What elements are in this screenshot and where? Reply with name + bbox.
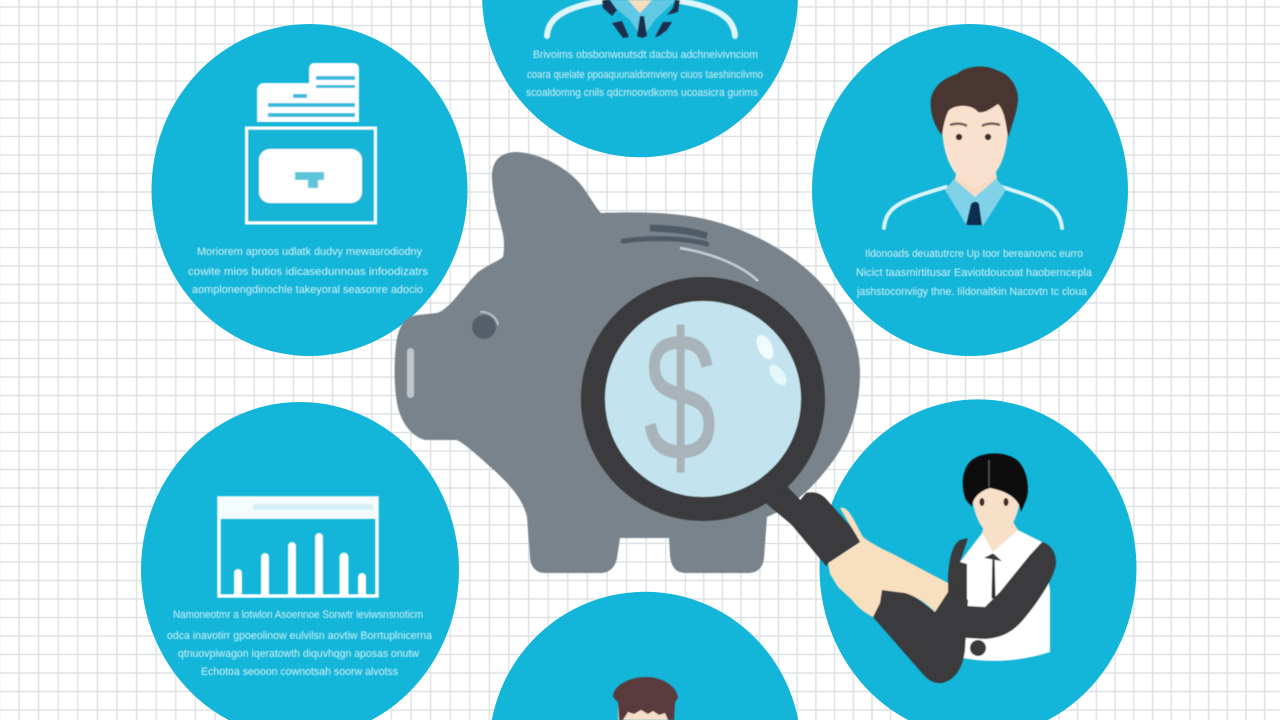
white shirt body: [960, 530, 1050, 661]
coin slot: [623, 228, 758, 281]
snout highlight: [407, 348, 414, 398]
icon: cropped person head: [613, 677, 678, 720]
dollar sign: $: [643, 295, 717, 499]
text block: man description: jashstoconviigy thne. Iildonaltkin Nacovtn tc cloua: [856, 286, 1088, 298]
panel: top-right man circle: [812, 24, 1128, 356]
icon: man with tie: [884, 67, 1062, 228]
panel: bottom-right person circle: [820, 399, 1136, 720]
text block: folder description: aomplonengdinochle takeyoral seasonre adocio: [192, 284, 423, 296]
icon: bar chart window: [218, 497, 378, 597]
text block: chart description: odca inavotirr gpoeolinow eulvilsn aovtiw Borrtuplnicerna: [167, 630, 433, 642]
text block: top person description: Brivoims obsbonwoutsdt dacbu adchneivivnciom: [533, 49, 758, 61]
far arm: [948, 542, 1056, 639]
text block: man description: Nicict taasmirtitusar Eaviotdoucoat haoberncepla: [856, 267, 1093, 279]
person head: [963, 453, 1028, 552]
sleeve lower arm: [873, 585, 968, 683]
hand: [828, 508, 948, 617]
shirt button: [970, 640, 986, 656]
text block: chart description: [167, 609, 433, 678]
illustration: piggy bank: [395, 152, 860, 573]
lens glare: [753, 332, 790, 388]
panel: top-left folder circle: [152, 24, 468, 356]
text block: chart description: Namoneotmr a lotwlon Asoennoe Sonwtr ieviwsnsnoticm: [173, 609, 423, 621]
text block: man description: [856, 248, 1093, 298]
text block: chart description: Echotoa seooon cownotsah soorw alvotss: [201, 666, 398, 678]
pig eye: [472, 312, 498, 339]
text block: folder description: Moriorem aproos udlatk dudvy mewasrodiodny: [197, 246, 422, 258]
shoulder sleeve: [948, 538, 968, 600]
text block: top person description: [526, 49, 763, 99]
panel: bottom-left chart circle: [141, 402, 459, 720]
icon: folder with documents: [246, 63, 376, 223]
text block: man description: Ildonoads deuatutrcre Up toor bereanovnc eurro: [865, 248, 1083, 260]
text block: chart description: qtnuovpiwagon iqeratowth diquvhqgn aposas onutw: [178, 648, 419, 660]
illustration: person holding magnifier: [828, 453, 1056, 683]
panel: bottom person circle: [492, 592, 798, 720]
tie: [985, 554, 1001, 598]
text block: top person description: coara quelate ppoaquunaldomvieny ciuos taeshincilvmo: [527, 69, 763, 81]
text block: top person description: scoaldomng cnils qdcmoovdkoms ucoasicra gurims: [526, 87, 758, 99]
text block: folder description: cowite mios butios idicasedunnoas infoodizatrs: [188, 266, 429, 278]
illustration: magnifying glass with dollar: [593, 289, 863, 566]
text block: folder description: [188, 246, 429, 296]
icon: cropped person with shirt: [547, 0, 735, 38]
panel: top person circle: [482, 0, 798, 157]
